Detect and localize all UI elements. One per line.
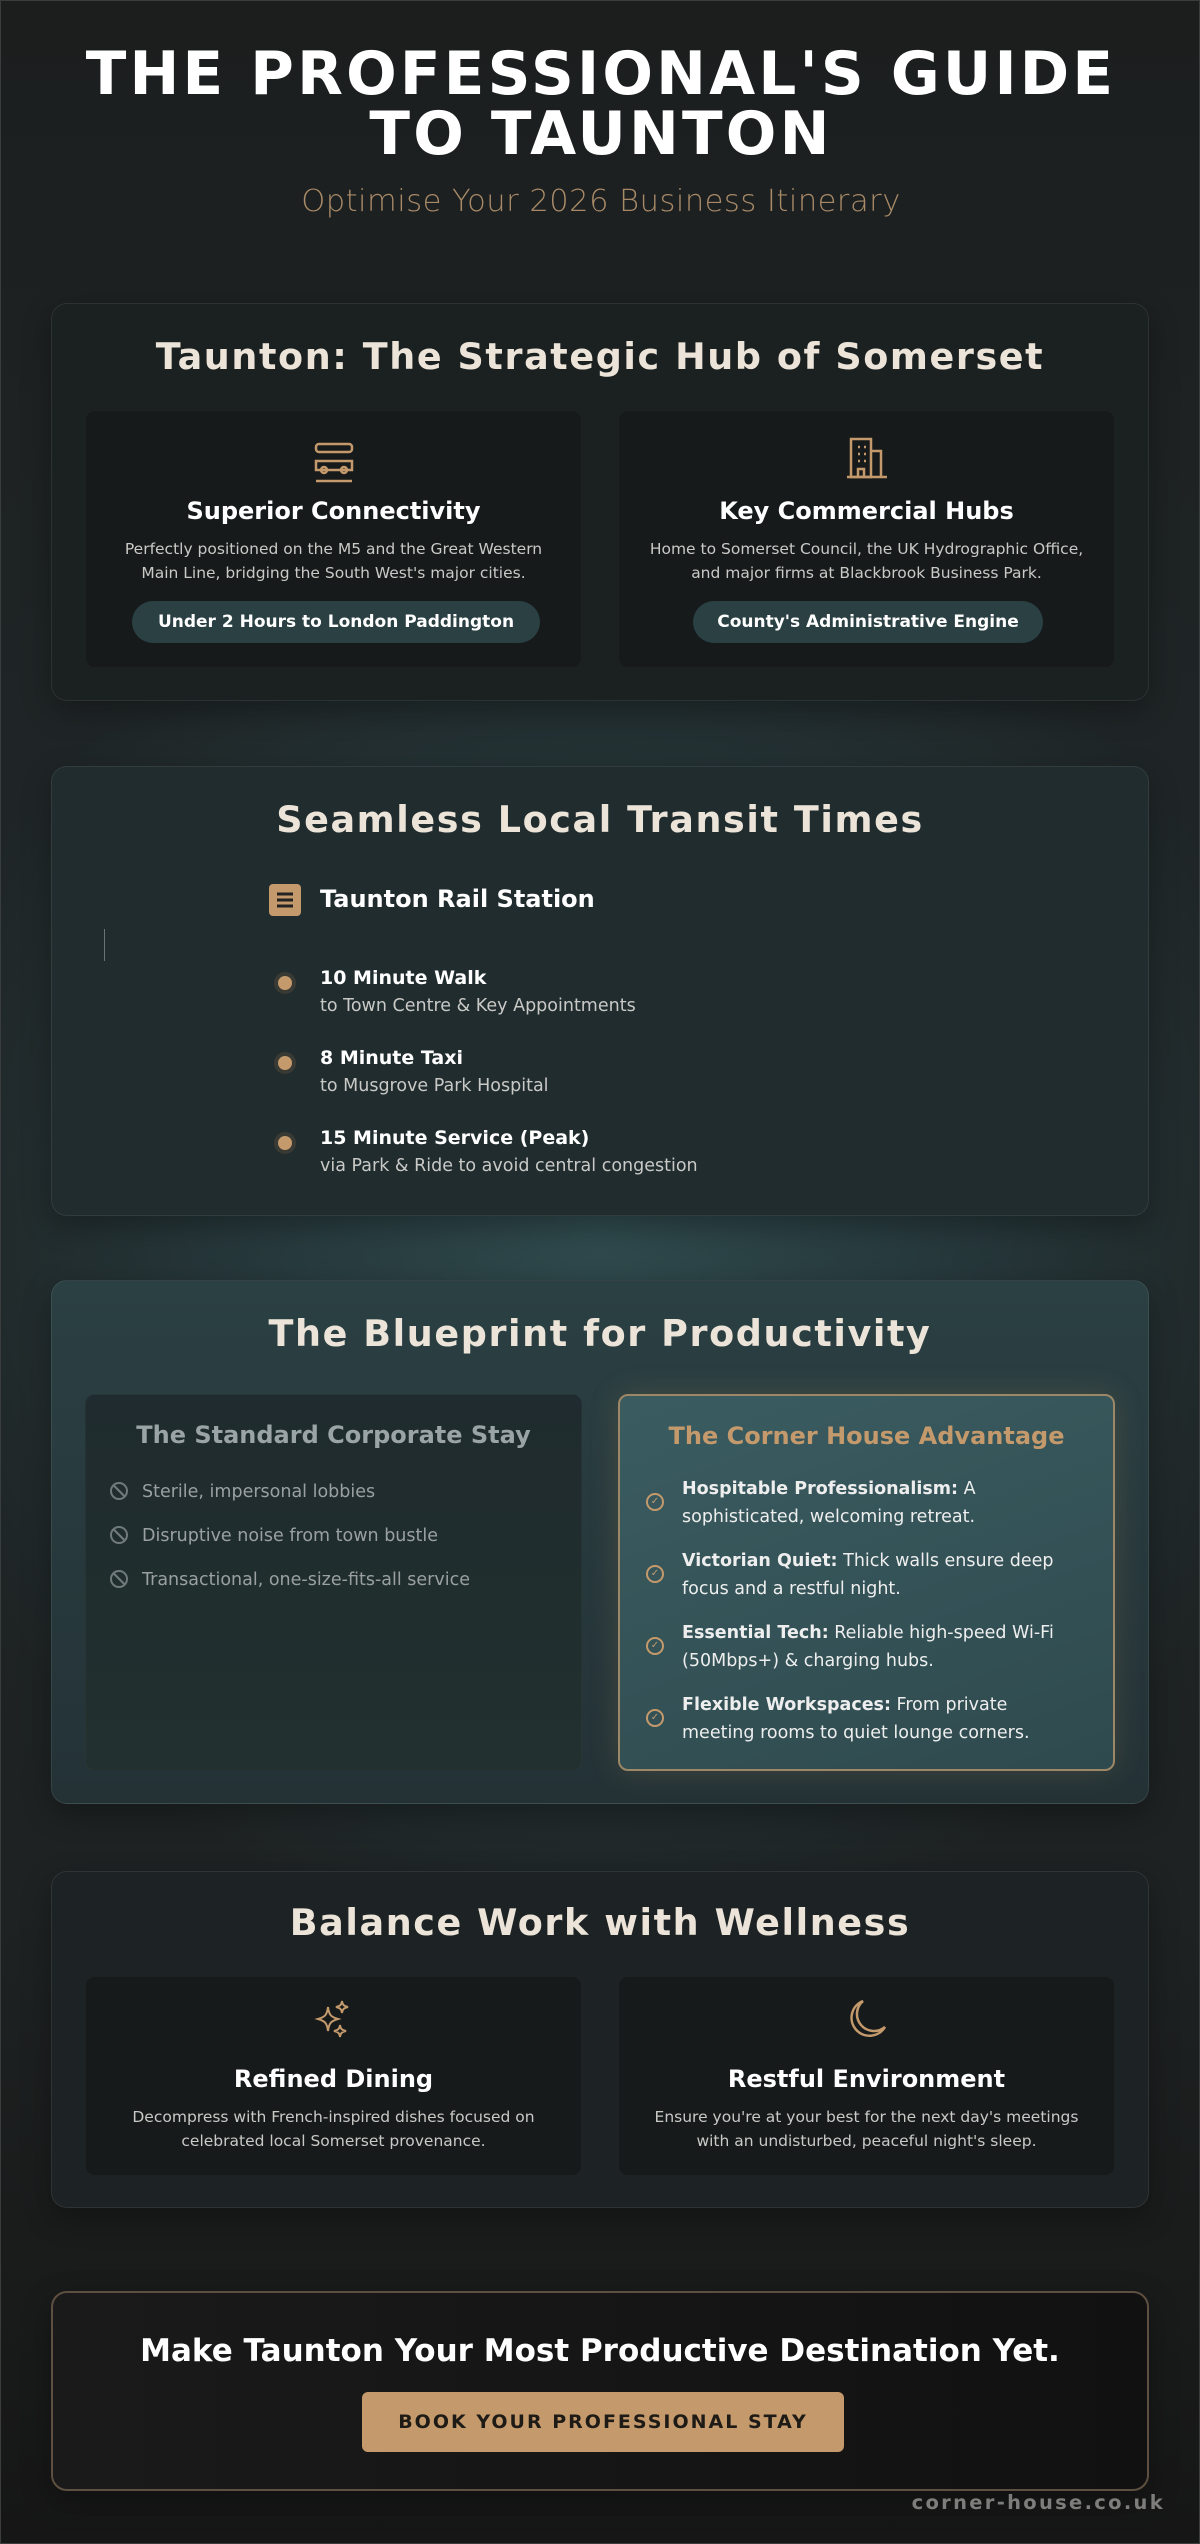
list: negatives: Disruptive noise from town bustle	[142, 1526, 438, 1546]
subtitle: Optimise Your 2026 Business Itinerary	[301, 184, 901, 219]
heading: connectivity: Superior Connectivity	[186, 497, 481, 525]
transit item 1: to Town Centre & Key Appointments	[320, 996, 636, 1016]
title: TO TAUNTON	[369, 100, 833, 169]
card: corner house advantage	[618, 1394, 1115, 1771]
CTA panel	[51, 2291, 1149, 2491]
label: station: Taunton Rail Station	[320, 885, 595, 913]
heading: standard: The Standard Corporate Stay	[136, 1421, 531, 1449]
footer url: corner-house.co.uk	[912, 2491, 1165, 2514]
text: restful	[655, 2108, 1078, 2150]
CTA heading: Make Taunton Your Most Productive Destination Yet.	[140, 2333, 1060, 2369]
list: advantages: ✓	[651, 1712, 659, 1723]
text: connectivity: Main Line, bridging the South West's major cities.	[141, 564, 526, 582]
list: advantages: Flexible Workspaces: From private meeting rooms to quiet lounge corners.	[682, 1695, 1030, 1743]
icon: station	[269, 884, 301, 916]
list: advantages: ✓	[651, 1496, 659, 1507]
list: advantages: ✓	[651, 1568, 659, 1579]
heading: strategic hub: Taunton: The Strategic Hub of Somerset	[156, 335, 1044, 378]
list: negatives	[110, 1482, 470, 1590]
heading: commercial: Key Commercial Hubs	[719, 497, 1014, 525]
list: advantages	[646, 1479, 1054, 1743]
heading: transit: Seamless Local Transit Times	[276, 798, 924, 841]
station row	[269, 884, 595, 916]
card: standard stay	[85, 1394, 582, 1771]
heading: advantage: The Corner House Advantage	[669, 1422, 1064, 1450]
transit item 1: 10 Minute Walk	[320, 967, 486, 989]
text: commercial: Home to Somerset Council, the UK Hydrographic Office,	[650, 540, 1083, 558]
heading: blueprint: The Blueprint for Productivity	[269, 1312, 931, 1355]
card: connectivity	[85, 410, 582, 668]
transit item 2: 8 Minute Taxi	[320, 1047, 463, 1069]
heading: dining: Refined Dining	[234, 2065, 433, 2093]
list: advantages: ✓	[651, 1640, 659, 1651]
card: dining	[85, 1976, 582, 2176]
transit item 3	[274, 1127, 698, 1176]
pill: admin engine: County's Administrative Engine	[717, 612, 1019, 632]
heading: restful: Restful Environment	[728, 2065, 1005, 2093]
text: dining: celebrated local Somerset provenance.	[181, 2132, 486, 2150]
card: restful	[618, 1976, 1115, 2176]
text: dining: Decompress with French-inspired dishes focused on	[132, 2108, 535, 2126]
list: advantages: Essential Tech: Reliable high-speed Wi-Fi (50Mbps+) & charging hubs.	[682, 1623, 1054, 1671]
pill: admin engine	[693, 601, 1043, 643]
icon: train	[314, 442, 354, 482]
text: connectivity: Perfectly positioned on the M5 and the Great Western	[125, 540, 542, 558]
panel: transit	[51, 766, 1149, 1216]
CTA button: BOOK YOUR PROFESSIONAL STAY	[398, 2411, 808, 2433]
heading: wellness: Balance Work with Wellness	[290, 1901, 910, 1944]
title	[86, 40, 1116, 169]
panel: wellness	[51, 1871, 1149, 2208]
text: commercial: and major firms at Blackbrook Business Park.	[691, 564, 1042, 582]
icon: sparkles	[314, 2000, 348, 2038]
transit item 3: via Park & Ride to avoid central congestion	[320, 1156, 698, 1176]
icon: building	[847, 438, 887, 478]
card: commercial hubs	[618, 410, 1115, 668]
text: restful: Ensure you're at your best for the next day's meetings	[655, 2108, 1078, 2126]
transit item 2: to Musgrove Park Hospital	[320, 1076, 549, 1096]
transit item 1	[274, 967, 636, 1016]
text: dining	[132, 2108, 535, 2150]
panel: strategic hub	[51, 303, 1149, 701]
list: negatives: Sterile, impersonal lobbies	[142, 1482, 375, 1502]
CTA button	[362, 2392, 844, 2452]
transit item 3: 15 Minute Service (Peak)	[320, 1127, 589, 1149]
text: connectivity	[125, 540, 542, 582]
panel: blueprint	[51, 1280, 1149, 1804]
list: advantages: Victorian Quiet: Thick walls ensure deep focus and a restful night.	[682, 1551, 1053, 1599]
list: negatives: Transactional, one-size-fits-all service	[142, 1570, 470, 1590]
title: THE PROFESSIONAL'S GUIDE	[86, 40, 1116, 109]
decorative line	[104, 929, 105, 961]
list: advantages: Hospitable Professionalism: A sophisticated, welcoming retreat.	[682, 1479, 976, 1527]
icon: moon	[850, 2000, 886, 2037]
transit item 2	[274, 1047, 549, 1096]
pill: London: Under 2 Hours to London Paddington	[158, 612, 514, 632]
text: restful: with an undisturbed, peaceful night's sleep.	[696, 2132, 1037, 2150]
text: commercial	[650, 540, 1083, 582]
pill: London	[132, 601, 540, 643]
